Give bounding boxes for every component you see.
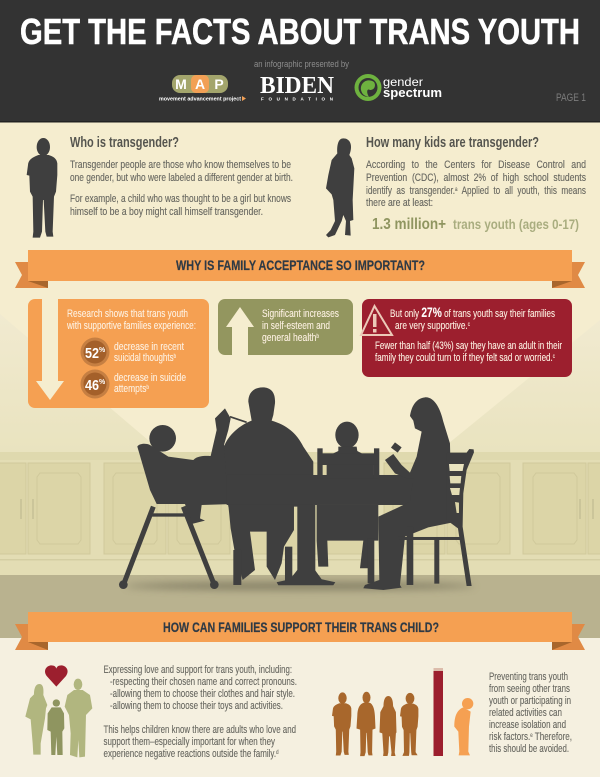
icon: transgender girl silhouette [326, 138, 354, 237]
icon: group of trans youth [332, 692, 418, 756]
logo: Biden Foundation: BIDEN [260, 73, 335, 99]
illustration: family at dinner table [119, 387, 474, 590]
banner: how can families support: HOW CAN FAMILIES SUPPORT THEIR TRANS CHILD? [163, 619, 439, 635]
stat: 52%: decrease in recent [114, 341, 184, 353]
icon: down arrow [36, 299, 64, 400]
icon: transgender boy silhouette [27, 138, 57, 238]
text: preventing trans youth: increase isolation and [489, 719, 566, 731]
text: preventing trans youth: risk factors. [489, 731, 545, 743]
logo: MAP: M [175, 76, 187, 92]
text: preventing trans youth [489, 671, 572, 755]
subtitle: an infographic presented by [254, 59, 349, 70]
definition text: Transgender people are those who know themselves to be [70, 159, 291, 171]
icon: isolated child [454, 698, 473, 755]
stat: 52%: % [99, 347, 106, 354]
text [262, 308, 339, 344]
banner: why is family acceptance so important: WHY IS FAMILY ACCEPTANCE SO IMPORTANT? [176, 257, 425, 273]
text: expressing love and support: This helps children know there are adults who love and [104, 724, 296, 736]
statistics text: there are at least: [366, 197, 433, 209]
logo: MAP: A [195, 76, 205, 92]
logo: MAP: P [214, 76, 224, 92]
banner: why is family acceptance so important [15, 250, 585, 288]
text: expressing love and support [104, 664, 297, 760]
text: expressing love and support: -respecting their chosen name and correct pronouns. [110, 676, 297, 688]
statistics text: a [455, 187, 458, 193]
big number: 1.3 million+ [372, 216, 446, 233]
logo: Gender Spectrum [354, 74, 442, 101]
father [224, 387, 313, 585]
panel: self-esteem [218, 299, 353, 355]
heading: How many kids are transgender? [366, 135, 539, 151]
text: in self-esteem and [262, 320, 330, 332]
mother figure [25, 684, 47, 755]
text: preventing trans youth: youth or participating in [489, 695, 571, 707]
text: expressing love and support: -allowing them to choose their clothes and hair style. [110, 688, 295, 700]
definition text: one gender, but who were labeled a different gender at birth. [70, 172, 293, 184]
intro text [66, 308, 196, 332]
father figure [65, 679, 92, 757]
definition text: For example, a child who was thought to be a girl but knows [70, 193, 291, 205]
stat: 52%: suicidal thoughts [114, 352, 196, 364]
text: expressing love and support: d [276, 750, 278, 756]
stat: 46%: 46 [85, 377, 99, 394]
text: preventing trans youth: Preventing trans youth [489, 671, 568, 683]
panel: who is transgender [70, 135, 293, 218]
child figure [47, 699, 64, 755]
icon: barrier bar [434, 668, 443, 756]
intro text: with supportive families experience: [66, 320, 196, 332]
text: are very supportive. [395, 320, 492, 332]
icon: warning triangle [361, 306, 392, 335]
icon: up arrow [226, 307, 254, 355]
logo: Gender Spectrum: gender [383, 75, 423, 89]
text: preventing trans youth: related activities can [489, 707, 562, 719]
big number label: trans youth (ages 0-17) [453, 217, 579, 232]
stat: 46%: attempts [114, 383, 156, 395]
text: But only 27% of trans youth say their families [390, 304, 555, 320]
text: expressing love and support: -allowing them to choose their toys and activities. [110, 700, 283, 712]
text: expressing love and support: experience negative reactions outside the family. [104, 748, 341, 760]
stat: 52%: b [174, 354, 176, 360]
heart [45, 665, 68, 687]
panel: how many kids are transgender [366, 135, 586, 233]
text: Significant increases [262, 308, 339, 320]
text: c [468, 322, 470, 328]
stat: 46%: b [146, 385, 150, 391]
toddler in high chair [119, 408, 247, 589]
mother on chair [363, 397, 474, 590]
text: expressing love and support: Expressing love and support for trans youth, including: [104, 664, 292, 676]
statistics text: identify as transgender. [366, 185, 486, 197]
logo: MAP [159, 75, 246, 102]
stat: 52% [80, 338, 184, 366]
text: b [316, 334, 320, 340]
text: preventing trans youth: e [530, 733, 533, 739]
text: preventing trans youth: this should be avoided. [489, 743, 569, 755]
banner: how can families support [15, 612, 585, 650]
logo: Biden Foundation: FOUNDATION [261, 96, 333, 102]
logo: MAP: movement advancement project [159, 96, 241, 102]
text: c [553, 354, 555, 360]
logo: Gender Spectrum: spectrum [383, 85, 442, 100]
text [375, 304, 562, 364]
text: expressing love and support: support them–especially important for when they [104, 736, 275, 748]
stat: 46%: % [99, 379, 106, 386]
panel: supportive families [28, 299, 209, 408]
panel: only 27 percent supportive [361, 299, 572, 377]
text: preventing trans youth: from seeing other trans [489, 683, 570, 695]
header band [0, 0, 600, 122]
definition text: himself to be a boy might call himself transgender. [70, 206, 263, 218]
text: general health [262, 332, 332, 344]
statistics text [366, 159, 586, 209]
stat: 46%: decrease in suicide [114, 372, 186, 384]
intro text: Research shows that trans youth [67, 308, 188, 320]
stat: 52%: 52 [85, 345, 99, 362]
definition text [70, 159, 293, 218]
child on chair [317, 422, 379, 583]
stat: 46% [80, 370, 186, 398]
page number: PAGE 1 [556, 92, 586, 104]
text: preventing trans youth: Therefore, [533, 731, 572, 743]
background: room wall and floor [0, 314, 600, 777]
icon: family with heart [25, 665, 92, 757]
table [227, 475, 417, 585]
heading: Who is transgender? [70, 135, 179, 151]
